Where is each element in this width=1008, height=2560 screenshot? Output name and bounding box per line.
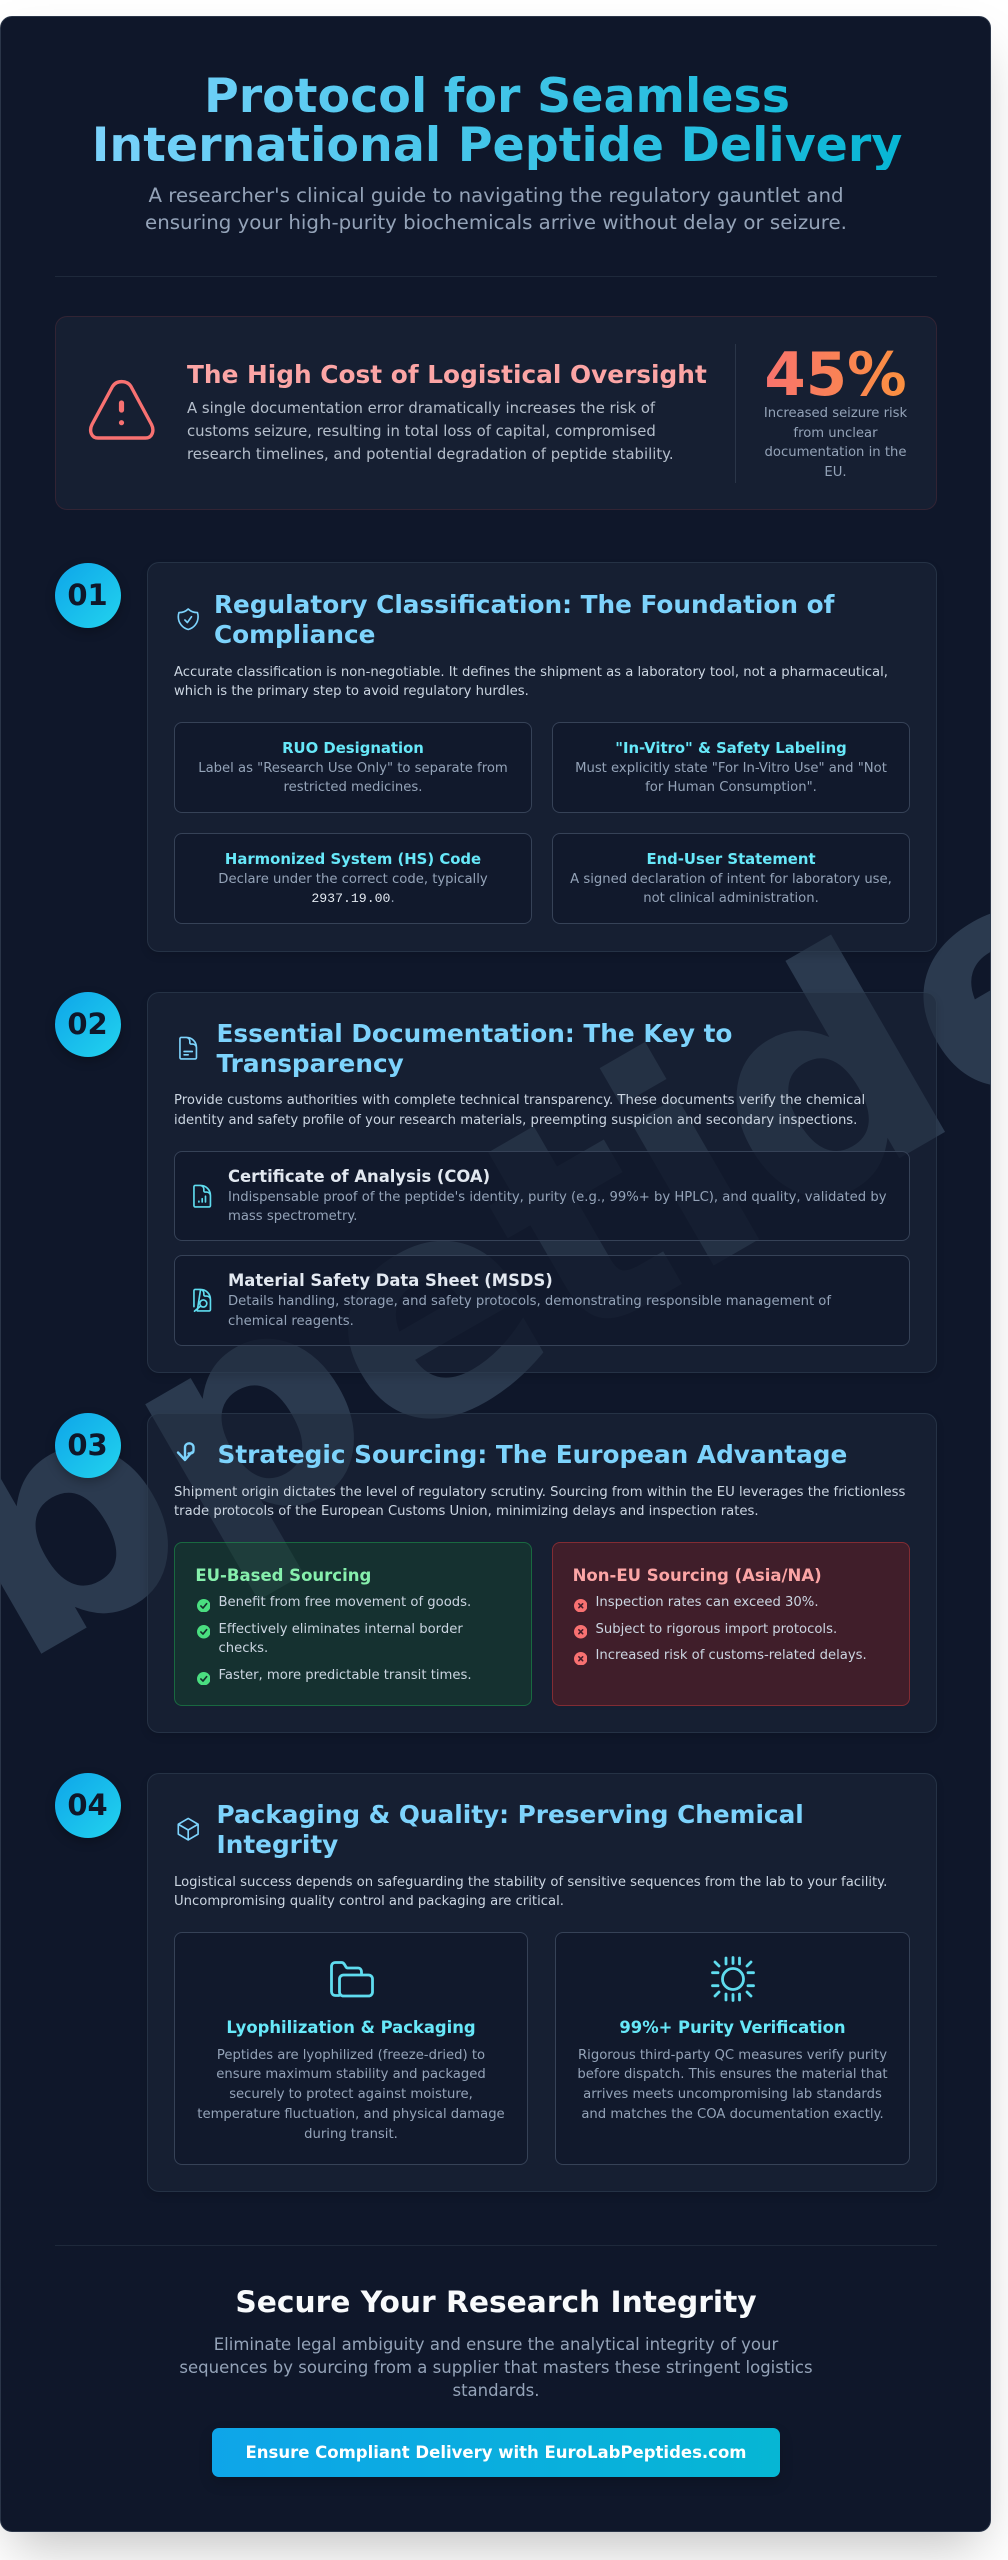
alert text: A single documentation error dramatically increases the risk of [187,398,655,416]
item text: MSDS: chemical reagents. [228,1314,354,1329]
heading: non-EU: Non-EU Sourcing (Asia/NA) [573,1566,822,1585]
intro text 03: trade protocols of the European Customs Union, minimizing delays and inspection rates. [174,1504,759,1519]
footer text: sequences by sourcing from a supplier that masters these stringent logistics [179,2358,813,2377]
list item: border checks [197,1622,463,1656]
panel: EU-based sourcing [174,1542,532,1706]
card: HS code [174,833,532,924]
card text: end-user statement: End-User Statement [646,850,816,868]
subtitle: A researcher's clinical guide to navigating the regulatory gauntlet and [148,184,844,207]
heading 04: Packaging & Quality: Preserving Chemical [216,1800,804,1829]
card text: in-vitro labeling [575,738,887,795]
item text: COA: mass spectrometry. [228,1209,358,1224]
footer heading: Secure Your Research Integrity [235,2285,757,2320]
intro text 01: which is the primary step to avoid regulatory hurdles. [174,684,529,699]
item card: MSDS [174,1255,910,1346]
intro text 01 [174,664,888,699]
card text: lyophilization: during transit. [304,2127,398,2142]
step number 03 [54,1413,120,1478]
icon: document search [193,1288,212,1312]
card: in-vitro labeling [552,722,910,813]
intro text 02: Provide customs authorities with complete technical transparency. These documents verify the chemical [174,1093,865,1108]
stat caption: Increased seizure risk [764,406,907,421]
card text: end-user statement: A signed declaration of intent for laboratory use, [570,872,892,886]
step number 02: 02 [67,1007,108,1041]
step number 04: 04 [67,1788,108,1822]
panel: essential documentation [147,992,936,1373]
panel: strategic sourcing [147,1413,936,1733]
heading 01 [214,590,835,648]
subtitle [145,184,847,234]
item text: MSDS: Details handling, storage, and safety protocols, demonstrating responsible management of [228,1294,831,1309]
icon: shield check [178,608,199,630]
call-to-action button: Ensure Compliant Delivery with EuroLabPeptides.com [246,2443,746,2462]
item text: COA [228,1190,886,1224]
intro text 04: Uncompromising quality control and packaging are critical. [174,1894,564,1909]
step number 01: 01 [67,578,108,612]
heading 02: Essential Documentation: The Key to [216,1018,732,1048]
card text: HS code [218,850,488,906]
card text: purity verification: before dispatch. This ensures the material that [577,2067,888,2082]
heading: EU-based: EU-Based Sourcing [195,1566,371,1585]
intro text 04: Logistical success depends on safeguarding the stability of sensitive sequences from the lab to your facility. [174,1874,887,1890]
alert heading: The High Cost of Logistical Oversight [187,360,707,389]
item title: COA: Certificate of Analysis (COA) [228,1166,490,1186]
card text: RUO designation: Label as "Research Use Only" to separate from [198,761,508,776]
card text: lyophilization: securely to protect against moisture, [229,2087,473,2102]
card text: HS code: Declare under the correct code, typically [218,872,488,886]
card text: RUO designation: restricted medicines. [284,780,422,795]
card text: purity verification: 99%+ Purity Verification [619,2018,846,2036]
stat caption: documentation in the [765,445,906,460]
title: Protocol for Seamless [204,69,790,124]
list item: free movement: Benefit from free movement of goods. [218,1595,471,1610]
card text: end-user statement [570,850,892,906]
alert text: research timelines, and potential degradation of peptide stability. [187,445,674,463]
subtitle: ensuring your high-purity biochemicals arrive without delay or seizure. [145,211,847,234]
card text: lyophilization: Lyophilization & Packaging [226,2018,476,2036]
panel: non-EU sourcing [552,1542,910,1706]
card: lyophilization [174,1932,528,2165]
step number 03: 03 [67,1428,108,1462]
card text: HS code: Harmonized System (HS) Code [225,850,481,868]
item title: MSDS: Material Safety Data Sheet (MSDS) [228,1270,553,1290]
intro text 03: Shipment origin dictates the level of regulatory scrutiny. Sourcing from within the EU leverages the frictionless [174,1484,905,1500]
icon: warning triangle [88,380,155,440]
footer text [179,2335,813,2400]
card text: in-vitro labeling: Must explicitly state "For In-Vitro Use" and "Not [575,761,887,776]
card text: lyophilization [197,2018,505,2142]
card: purity verification [555,1932,910,2165]
card: end-user statement [552,833,910,924]
card text: purity verification: Rigorous third-party QC measures verify purity [578,2048,887,2062]
heading 01: Compliance [214,620,375,648]
list item: transit times: Faster, more predictable transit times. [218,1668,472,1683]
card text: lyophilization: temperature fluctuation, and physical damage [197,2107,505,2122]
step number 02 [54,992,120,1057]
icon: cube [177,1818,199,1841]
intro text 02: identity and safety profile of your research materials, preempting suspicion and secondary inspections. [174,1113,857,1128]
intro text 04 [174,1874,887,1909]
list item: border checks: checks. [218,1641,268,1656]
step number 01 [54,562,120,628]
item text: MSDS [228,1294,832,1329]
footer text: standards. [452,2381,540,2400]
heading 04: Integrity [216,1830,338,1859]
panel: high cost alert [55,316,936,510]
list item: import protocols: Subject to rigorous import protocols. [596,1622,837,1637]
card text: purity verification: arrives meets uncompromising lab standards [583,2087,882,2102]
card text: RUO designation: RUO Designation [282,738,424,756]
title: International Peptide Delivery [92,118,902,173]
icon: sourcing arrow [176,1442,195,1462]
heading 03: Strategic Sourcing: The European Advantage [218,1440,847,1468]
title [90,72,904,170]
card text: in-vitro labeling: for Human Consumption". [645,780,817,795]
item text: COA: Indispensable proof of the peptide's identity, purity (e.g., 99%+ by HPLC), and quality, validated by [228,1190,886,1204]
intro text 02 [174,1093,865,1128]
list item: inspection rates: Inspection rates can exceed 30%. [596,1595,819,1610]
icon: document [179,1036,198,1060]
heading 01: Regulatory Classification: The Foundation of [214,590,834,618]
stat caption: from unclear [793,426,878,441]
intro text 03 [174,1484,905,1519]
panel: packaging and quality [147,1773,936,2192]
card text: lyophilization: ensure maximum stability and packaged [216,2067,486,2082]
icon: document chart [193,1184,212,1208]
alert text: customs seizure, resulting in total loss of capital, compromised [187,422,656,440]
icon: folder [330,1961,374,1998]
card text: purity verification [577,2018,888,2122]
heading 02: Transparency [216,1048,404,1078]
card text: HS code: 2937.19.00. [311,891,395,906]
list item: border checks: Effectively eliminates internal border [218,1622,463,1637]
list item: customs delays: Increased risk of customs-related delays. [596,1648,867,1663]
card: RUO designation [174,722,532,813]
card text: purity verification: and matches the COA documentation exactly. [581,2107,884,2122]
card text: lyophilization: Peptides are lyophilized (freeze-dried) to [217,2048,485,2062]
panel: regulatory classification [147,562,936,952]
card text: in-vitro labeling: "In-Vitro" & Safety Labeling [615,738,847,756]
call-to-action button [212,2428,780,2477]
stat: 45%: 45% [764,341,907,410]
heading 02 [216,1018,732,1078]
icon: sun / purity seal [711,1956,755,2002]
intro text 01: Accurate classification is non-negotiable. It defines the shipment as a laboratory tool, not a pharmaceutical, [174,664,888,680]
alert text [187,398,674,463]
heading 04 [216,1800,804,1859]
footer text: Eliminate legal ambiguity and ensure the analytical integrity of your [214,2335,778,2354]
card text: RUO designation [198,738,508,795]
step number 04 [54,1773,120,1838]
card text: end-user statement: not clinical administration. [643,891,819,906]
stat caption: EU. [824,465,847,480]
stat caption [764,406,907,480]
item card: COA [174,1151,910,1241]
